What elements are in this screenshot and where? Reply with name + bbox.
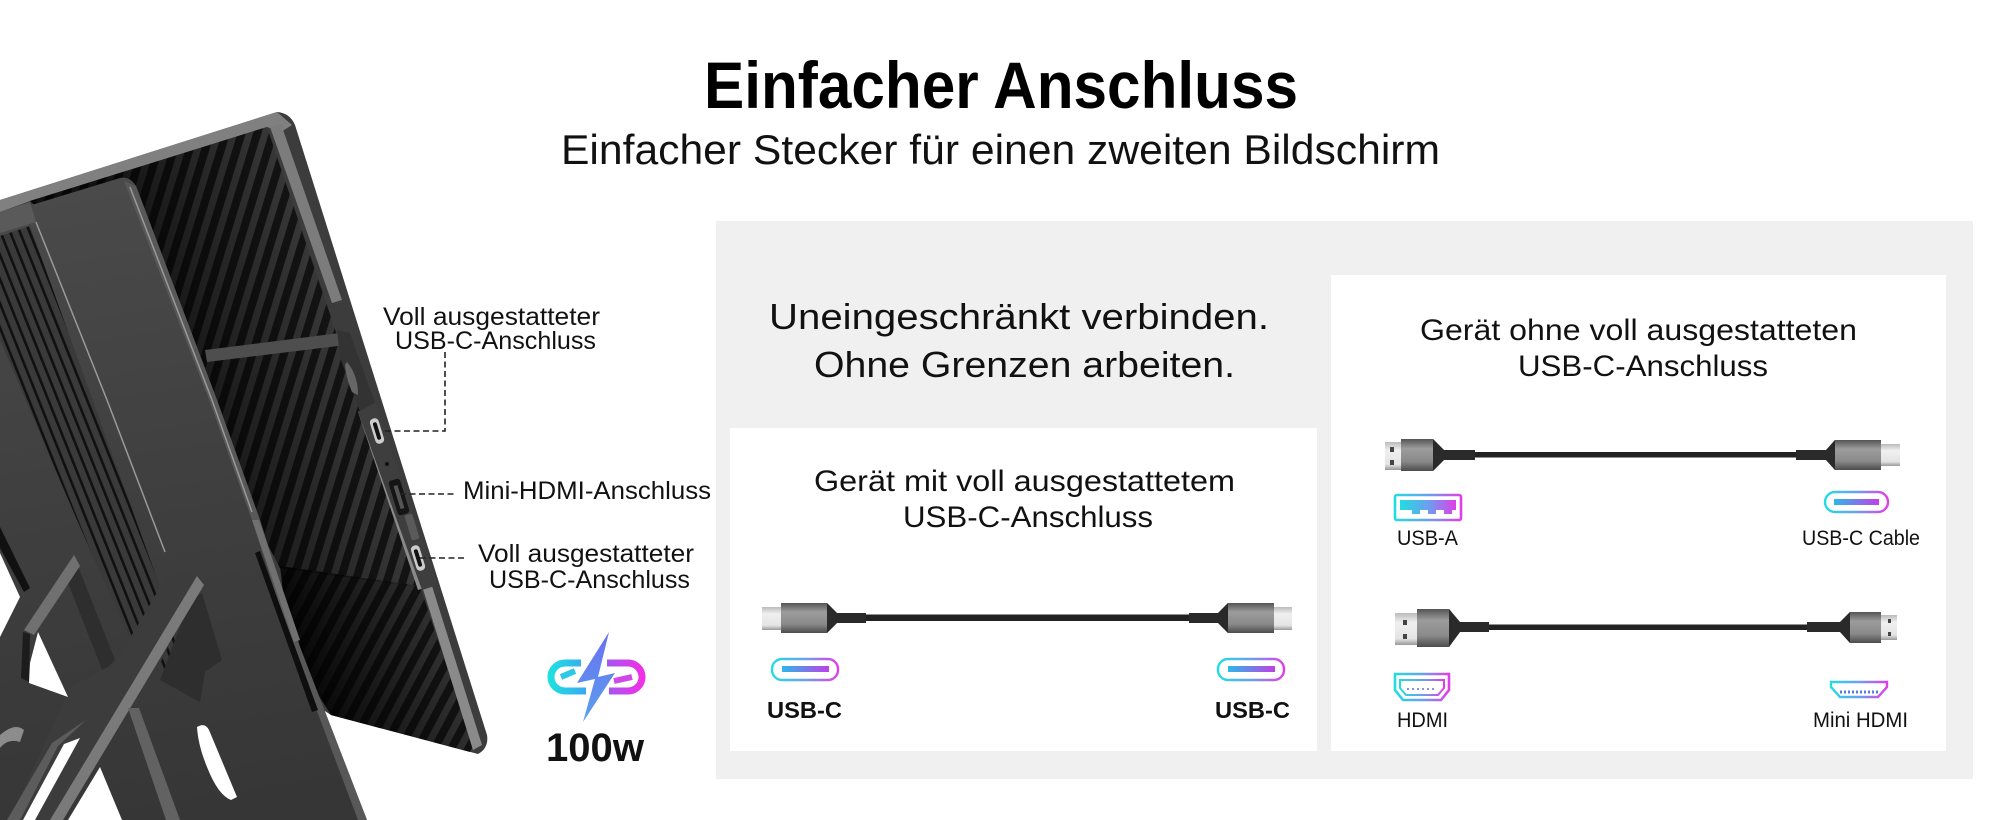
- label: upper USB-C port: USB-C-Anschluss: [395, 327, 596, 355]
- label: mini HDMI port: Mini-HDMI-Anschluss: [463, 477, 711, 505]
- port strip: [358, 403, 438, 590]
- dashed leader: lower USB-C: [420, 557, 466, 559]
- card heading: USB-C-Anschluss: [903, 501, 1153, 534]
- monitor bezel strip right upper: [270, 124, 342, 303]
- card: device with full-featured USB-C: [730, 428, 1317, 751]
- stand side strip: [7, 720, 86, 820]
- card heading: [1420, 314, 1857, 383]
- cable: USB-C to USB-C: [762, 603, 1292, 633]
- dashed leader: mini HDMI: [400, 493, 454, 495]
- stand rib: [128, 708, 180, 820]
- label: lower USB-C port: Voll ausgestatteter: [478, 540, 694, 568]
- monitor cross strap: [205, 333, 346, 362]
- panel: connection options: [716, 221, 1973, 779]
- monitor back shell: [0, 112, 487, 754]
- panel heading: Ohne Grenzen arbeiten.: [814, 344, 1235, 385]
- label: lower USB-C port: USB-C-Anschluss: [489, 566, 690, 594]
- card: device without full-featured USB-C: [1331, 275, 1946, 751]
- title: Einfacher Anschluss: [704, 48, 1298, 122]
- label: lower USB-C port: [478, 540, 694, 594]
- panel heading: [769, 296, 1269, 385]
- icon: 100W charging link: [551, 632, 642, 722]
- edge slot: [255, 551, 318, 712]
- stand vent lower patch: [157, 632, 187, 675]
- stand plate: [0, 178, 367, 820]
- stand band beside vent: [68, 566, 115, 672]
- label: USB-C left: USB-C: [767, 697, 842, 723]
- icon: USB-C left: [772, 659, 838, 680]
- stand dark slot left: [0, 527, 30, 592]
- USB-C port lower: [410, 544, 426, 572]
- label: upper USB-C port: [383, 303, 600, 355]
- indicator dot: [385, 462, 389, 466]
- icon: USB-C cable: [1825, 492, 1888, 512]
- hinge block: [337, 330, 375, 412]
- label: HDMI: HDMI: [1397, 709, 1448, 732]
- stand leg small strip: [24, 555, 80, 635]
- mini HDMI port: [388, 478, 410, 516]
- stand knob: [0, 727, 24, 748]
- monitor carbon back lower: [280, 566, 473, 752]
- label: USB-A: USB-A: [1397, 527, 1458, 550]
- monitor with stand, rear view: [0, 112, 487, 820]
- cable: HDMI to mini HDMI: [1395, 609, 1897, 647]
- stand leg bright strip: [50, 576, 204, 820]
- cable: USB-A to USB-C: [1385, 439, 1900, 471]
- icon: USB-C right: [1218, 659, 1284, 680]
- stand highlight lines: [36, 187, 252, 552]
- label: Mini HDMI: Mini HDMI: [1813, 709, 1908, 732]
- card heading: USB-C-Anschluss: [1518, 350, 1768, 383]
- card heading: [814, 465, 1235, 534]
- stand plate vent: [0, 226, 160, 640]
- card heading: Gerät mit voll ausgestattetem: [814, 465, 1235, 498]
- icon: USB-A: [1395, 495, 1461, 520]
- label: upper USB-C port: Voll ausgestatteter: [383, 303, 600, 331]
- stand openings: [0, 553, 20, 637]
- stand plate top block: [0, 202, 36, 233]
- stand plate edge strip: [124, 181, 367, 820]
- icon: HDMI: [1395, 674, 1449, 700]
- label: USB-C right: USB-C: [1215, 697, 1290, 723]
- dashed leader: upper USB-C: [385, 350, 445, 431]
- subtitle: Einfacher Stecker für einen zweiten Bildschirm: [561, 126, 1440, 173]
- monitor carbon back upper: [30, 127, 422, 588]
- card heading: Gerät ohne voll ausgestatteten: [1420, 314, 1857, 347]
- label: USB-C Cable: USB-C Cable: [1802, 527, 1920, 550]
- monitor bezel strip right lower: [358, 408, 424, 590]
- USB-C port upper: [369, 417, 385, 445]
- panel heading: Uneingeschränkt verbinden.: [769, 296, 1269, 337]
- monitor bezel strip top: [0, 112, 292, 212]
- label: 100w: 100w: [546, 726, 645, 770]
- stand leg body: [10, 568, 202, 820]
- icon: mini HDMI: [1831, 682, 1887, 697]
- card slot: [404, 513, 420, 541]
- stand block right of leg: [160, 593, 222, 702]
- edge strip highlight: [252, 520, 300, 642]
